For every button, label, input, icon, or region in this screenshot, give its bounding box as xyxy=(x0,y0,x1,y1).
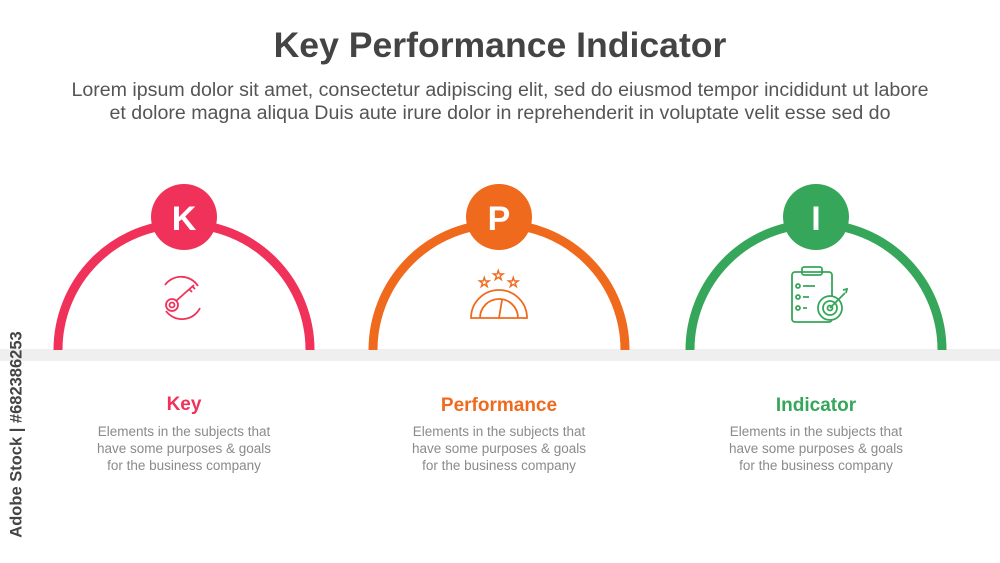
text: Key: for the business company xyxy=(107,458,261,473)
text: Key xyxy=(97,394,271,473)
icon: gauge: ☆ xyxy=(478,274,491,290)
subtitle xyxy=(71,79,929,124)
text: Key: Elements in the subjects that xyxy=(98,424,270,439)
text: Key: Key xyxy=(167,394,201,415)
watermark id: Adobe Stock | #682386253 xyxy=(8,331,26,538)
text: Key: have some purposes & goals xyxy=(97,441,271,456)
text: Performance: Elements in the subjects that xyxy=(413,424,585,439)
icon: gauge: ☆ xyxy=(492,267,505,283)
text: Performance: for the business company xyxy=(422,458,576,473)
icon: gauge xyxy=(471,267,527,318)
panel: P xyxy=(373,184,625,350)
text: Performance: have some purposes & goals xyxy=(412,441,586,456)
subtitle: Lorem ipsum dolor sit amet, consectetur adipiscing elit, sed do eiusmod tempor incididunt ut labore xyxy=(71,79,929,101)
panel: P: P xyxy=(488,200,510,238)
subtitle: et dolore magna aliqua Duis aute irure dolor in reprehenderit in voluptate velit esse sed do xyxy=(110,102,890,124)
text: Performance: Performance xyxy=(441,395,557,416)
title: Key Performance Indicator xyxy=(274,25,726,65)
text: Indicator: Elements in the subjects that xyxy=(730,424,902,439)
icon: gauge: ☆ xyxy=(507,274,520,290)
text: Indicator: Indicator xyxy=(776,395,856,416)
text: Indicator: for the business company xyxy=(739,458,893,473)
panel: K xyxy=(58,184,310,350)
icon: clipboard target xyxy=(792,267,847,322)
panel: K: K xyxy=(172,200,197,238)
gray band xyxy=(0,349,1000,361)
text: Indicator xyxy=(729,395,903,473)
text: Indicator: have some purposes & goals xyxy=(729,441,903,456)
icon: key xyxy=(165,277,200,319)
panel: I xyxy=(690,184,942,350)
text: Performance xyxy=(412,395,586,473)
panel: I: I xyxy=(811,200,821,238)
